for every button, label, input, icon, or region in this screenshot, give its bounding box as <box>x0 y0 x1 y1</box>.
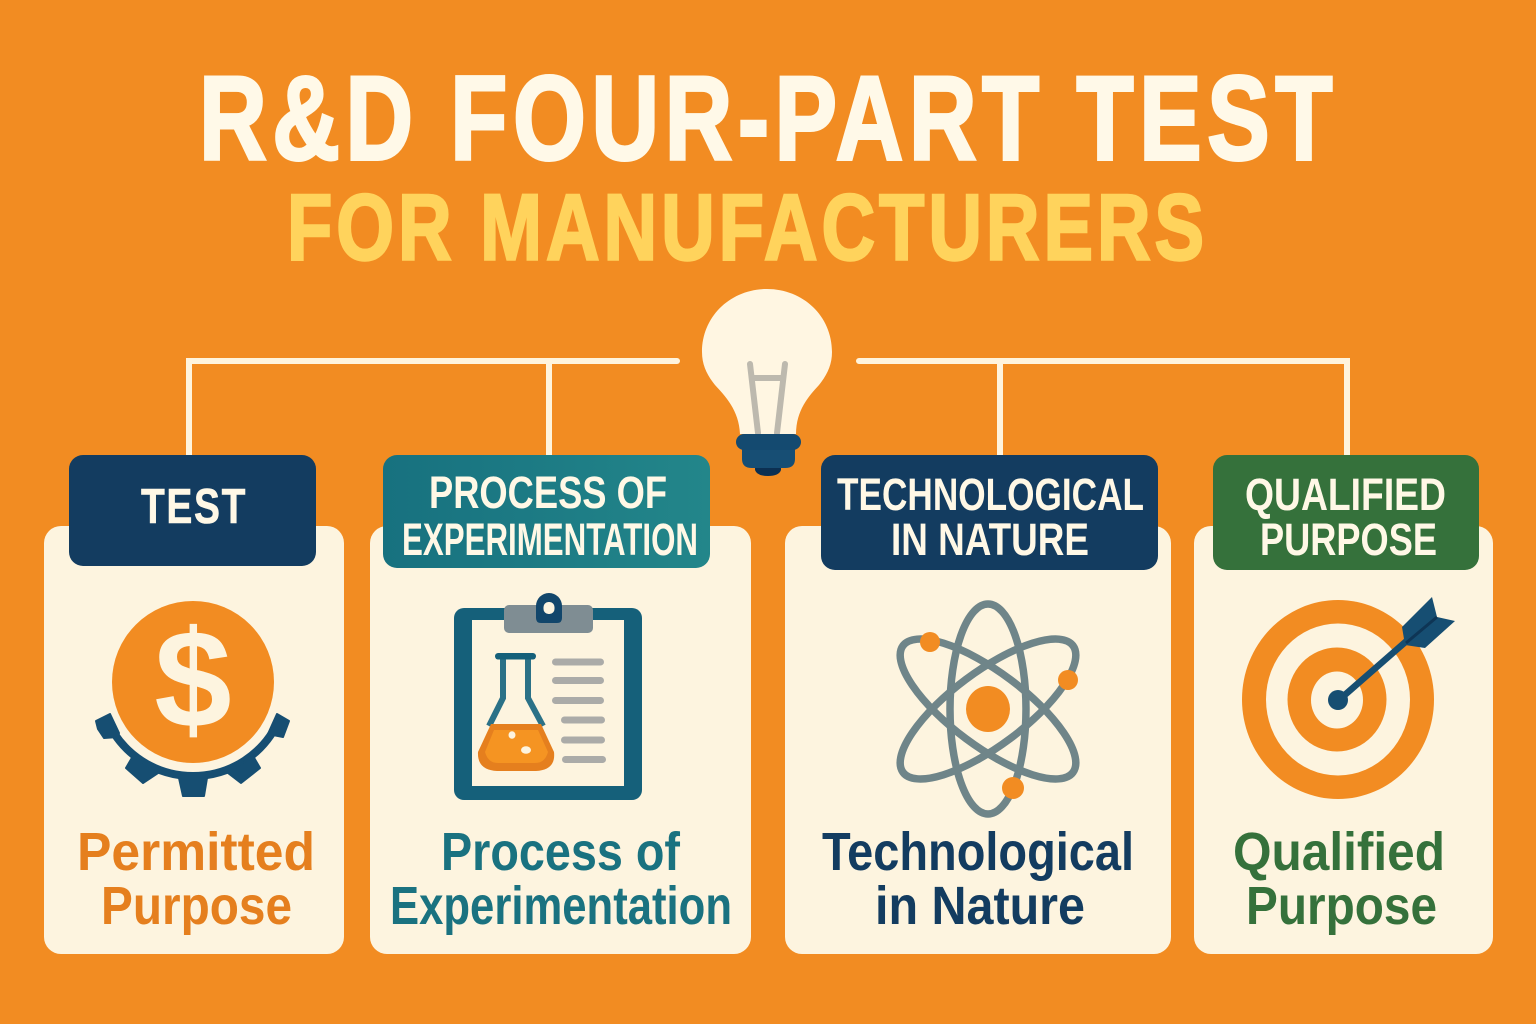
icon: dollar coin and gear <box>96 601 289 796</box>
header: technological in nature <box>821 455 1158 570</box>
header: qualified purpose: QUALIFIED <box>1245 469 1446 520</box>
icon: clipboard and flask <box>454 593 642 800</box>
panel: permitted purpose <box>44 455 344 954</box>
connector: left branch <box>189 361 677 455</box>
label: permitted purpose <box>77 822 315 936</box>
label: qualified purpose: Purpose <box>1246 876 1437 936</box>
icon: dollar coin and gear: $ <box>154 602 232 757</box>
header: process of experimentation: PROCESS OF <box>429 467 667 518</box>
panel: process of experimentation <box>370 455 751 954</box>
label: process of experimentation: Process of <box>441 822 681 882</box>
icon: light bulb <box>702 289 832 476</box>
header: test: TEST <box>141 480 247 534</box>
panel: qualified purpose <box>1194 455 1493 954</box>
header: technological in nature: TECHNOLOGICAL <box>837 469 1144 520</box>
icon: target and arrow <box>1242 597 1455 799</box>
label: technological in nature: in Nature <box>875 876 1085 936</box>
subtitle: FOR MANUFACTURERS <box>287 174 1208 280</box>
panel: technological in nature <box>785 455 1171 954</box>
label: permitted purpose: Permitted <box>77 822 315 882</box>
label: process of experimentation <box>390 822 732 936</box>
label: technological in nature: Technological <box>822 822 1134 882</box>
label: technological in nature <box>822 822 1134 936</box>
label: permitted purpose: Purpose <box>101 876 292 936</box>
icon: atom <box>881 604 1095 814</box>
label: qualified purpose: Qualified <box>1233 822 1445 882</box>
label: qualified purpose <box>1233 822 1445 936</box>
header: process of experimentation <box>383 455 710 568</box>
label: process of experimentation: Experimentation <box>390 876 732 936</box>
connector: right branch <box>859 361 1347 455</box>
header: technological in nature: IN NATURE <box>891 514 1089 565</box>
header: process of experimentation: EXPERIMENTATION <box>402 514 698 565</box>
header: test <box>69 455 316 566</box>
header: qualified purpose <box>1213 455 1479 570</box>
header: qualified purpose: PURPOSE <box>1260 514 1437 565</box>
